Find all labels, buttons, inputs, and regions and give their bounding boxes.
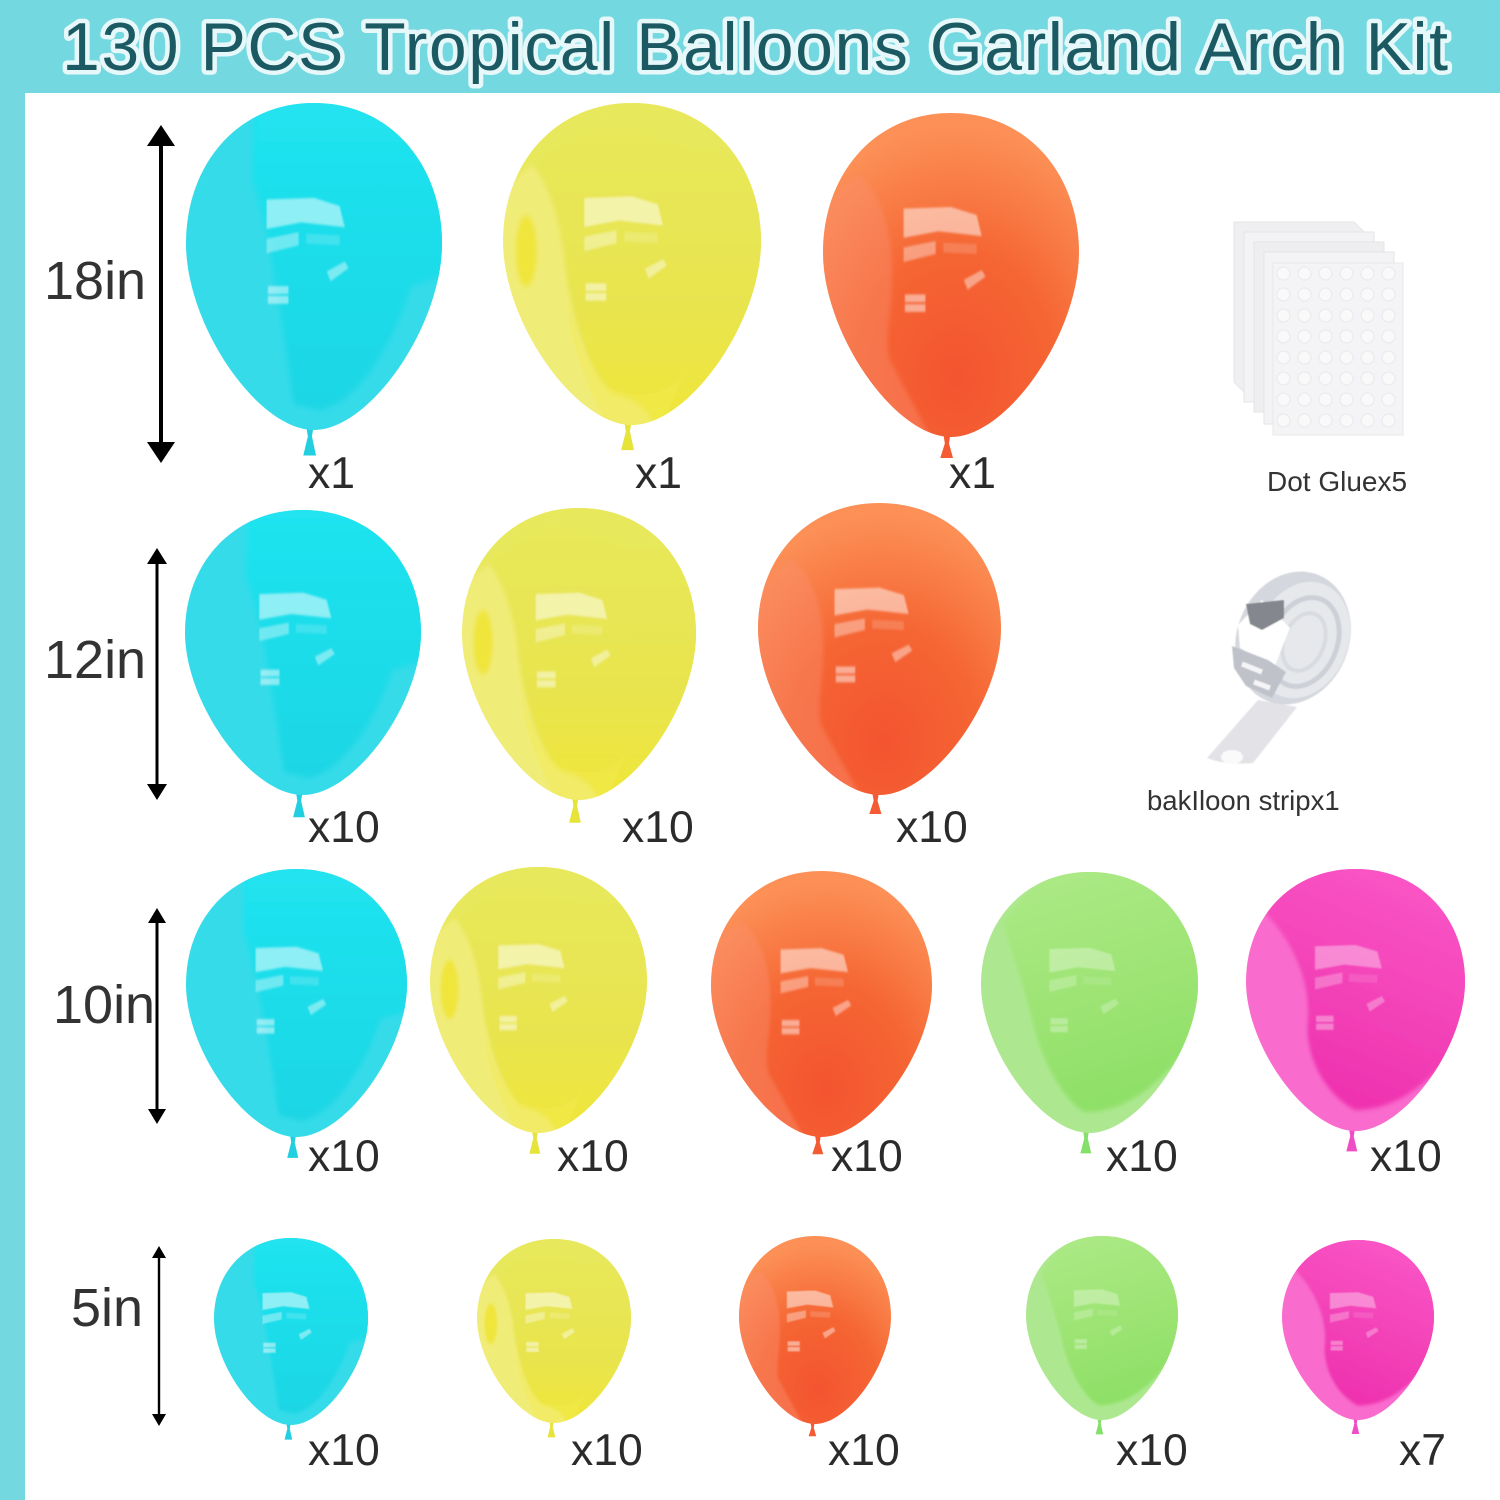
row: 5in balloons xyxy=(71,1227,1446,1475)
quantity: orange x10: x10 xyxy=(896,803,968,852)
accessory: balloon strip xyxy=(1147,554,1370,816)
row: 10in balloons xyxy=(53,854,1476,1181)
quantity: orange x1: x1 xyxy=(949,449,996,498)
quantity: green x10: x10 xyxy=(1106,1132,1178,1181)
balloon: green 5in xyxy=(1026,1227,1186,1434)
balloon: teal 5in xyxy=(214,1229,376,1440)
arrow: 18in height xyxy=(147,125,175,463)
accessory: dot glue sheets xyxy=(1234,222,1407,497)
balloon: orange 12in xyxy=(751,503,1001,814)
balloon: orange 5in xyxy=(734,1236,891,1436)
balloon: yellow 12in xyxy=(450,493,708,823)
arrow: 12in height xyxy=(147,548,167,800)
quantity: yellow x10: x10 xyxy=(622,803,694,852)
balloon: teal 18in xyxy=(186,87,455,456)
size label: 18in: 18in xyxy=(44,251,146,311)
icon: balloon strip roll xyxy=(1207,554,1370,764)
balloon: orange 10in xyxy=(704,871,932,1154)
arrow: 10in height xyxy=(148,908,166,1124)
quantity: pink x10: x10 xyxy=(1370,1132,1442,1181)
quantity: green x10: x10 xyxy=(1116,1426,1188,1475)
quantity: orange x10: x10 xyxy=(831,1132,903,1181)
quantity: pink x7: x7 xyxy=(1399,1426,1446,1475)
icon: stacked glue dot sheets xyxy=(1234,222,1403,435)
balloon: teal 12in xyxy=(185,496,433,817)
quantity: yellow x1: x1 xyxy=(635,449,682,498)
balloon: pink 5in xyxy=(1274,1231,1442,1434)
row: 12in balloons xyxy=(44,493,1001,852)
quantity: yellow x10: x10 xyxy=(571,1426,643,1475)
balloon: green 10in xyxy=(981,859,1209,1153)
title: 130 PCS Tropical Balloons Garland Arch Kit xyxy=(62,9,1448,85)
label: dot glue: Dot Gluex5 xyxy=(1267,466,1407,497)
quantity: teal x10: x10 xyxy=(308,803,380,852)
row: 18in balloons xyxy=(44,87,1079,498)
size label: 10in: 10in xyxy=(53,975,155,1035)
size label: 5in: 5in xyxy=(71,1278,143,1338)
balloon: orange 18in xyxy=(815,113,1079,458)
quantity: teal x1: x1 xyxy=(308,449,355,498)
quantity: orange x10: x10 xyxy=(828,1426,900,1475)
balloon: teal 10in xyxy=(186,856,418,1158)
balloon: pink 10in xyxy=(1235,856,1476,1151)
arrow: 5in height xyxy=(152,1246,166,1426)
balloon: yellow 10in xyxy=(419,854,658,1154)
quantity: teal x10: x10 xyxy=(308,1426,380,1475)
balloon: yellow 18in xyxy=(490,87,774,450)
quantity: yellow x10: x10 xyxy=(557,1132,629,1181)
label: balloon strip: bakIloon stripx1 xyxy=(1147,785,1340,816)
size label: 12in: 12in xyxy=(44,630,146,690)
balloon: yellow 5in xyxy=(469,1230,639,1437)
quantity: teal x10: x10 xyxy=(308,1132,380,1181)
